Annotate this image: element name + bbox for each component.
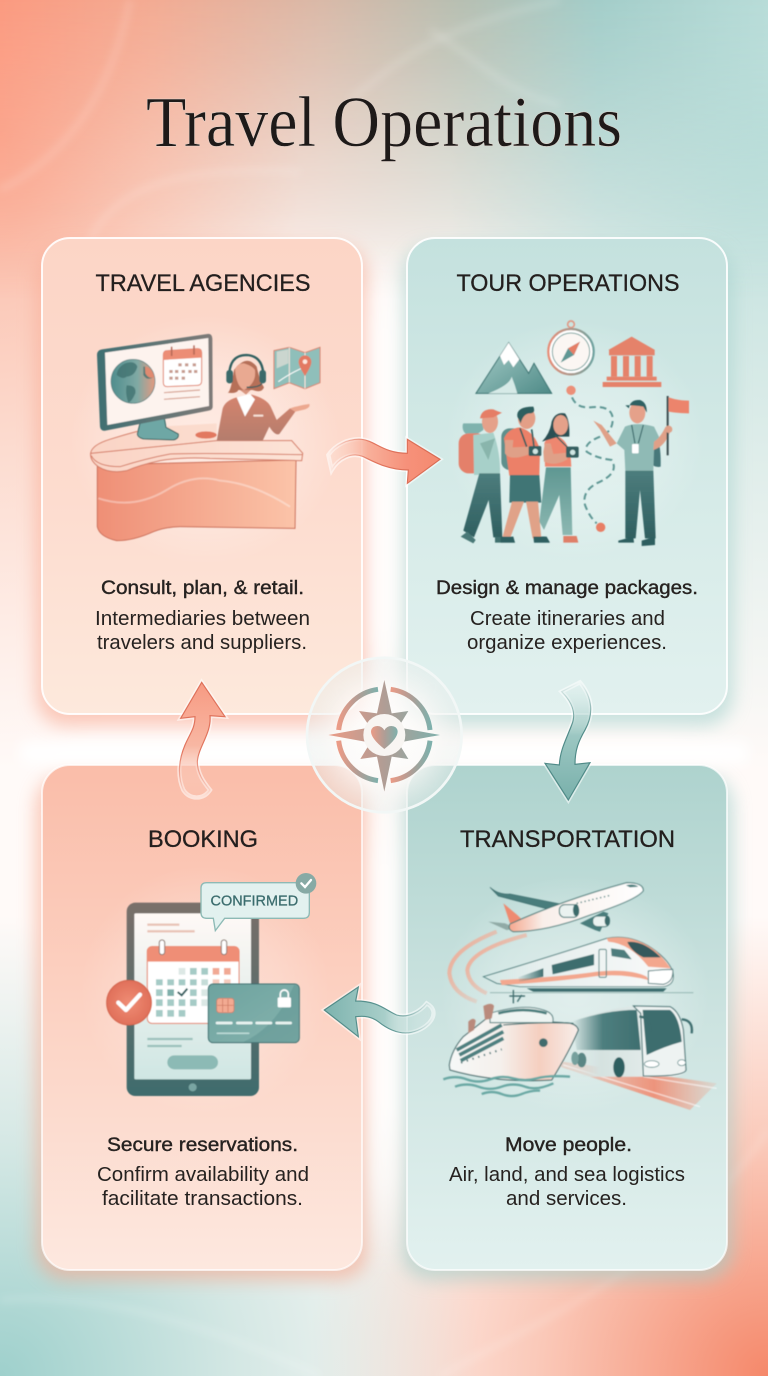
calendar xyxy=(147,940,239,1023)
text: transportation: and services. xyxy=(506,1188,627,1210)
panel: travel agencies xyxy=(42,238,362,714)
text: travel agencies: Intermediaries between xyxy=(95,608,310,630)
compass ring xyxy=(339,689,430,781)
dashed route xyxy=(566,386,614,532)
hiker with backpack xyxy=(459,409,515,543)
gap highlights xyxy=(20,240,748,1280)
agent figure xyxy=(217,355,310,441)
text: transportation: Move people. xyxy=(505,1134,632,1156)
monitor xyxy=(97,334,213,440)
mountain xyxy=(476,343,552,393)
train xyxy=(483,937,693,993)
motion trails xyxy=(449,932,527,1002)
panel: transportation xyxy=(407,765,727,1270)
icon: travel agent at desk xyxy=(91,334,320,541)
confirmed bubble xyxy=(201,873,316,931)
text: tour operations: Create itineraries and xyxy=(470,608,665,630)
arrow: booking to agencies xyxy=(179,682,225,797)
map xyxy=(274,347,320,389)
bus xyxy=(560,1006,717,1110)
arrow: agencies to tour operations xyxy=(328,439,440,483)
illustration: tour group with guide xyxy=(459,321,689,546)
check badge xyxy=(107,980,151,1025)
waves xyxy=(443,1076,570,1096)
heart xyxy=(371,726,398,749)
tablet xyxy=(127,903,259,1096)
confirmed bubble: CONFIRMED xyxy=(210,894,298,910)
text: travel agencies: travelers and suppliers. xyxy=(97,632,307,654)
text: booking xyxy=(97,1134,309,1210)
illustration glow xyxy=(445,320,705,560)
arrow: tour operations to transportation xyxy=(545,682,591,800)
panel: tour operations xyxy=(407,238,727,714)
heading: travel agencies: TRAVEL AGENCIES xyxy=(96,270,310,297)
text: travel agencies xyxy=(95,577,310,654)
text: tour operations: organize experiences. xyxy=(467,632,667,654)
illustration glow xyxy=(80,865,330,1115)
credit card xyxy=(208,984,299,1043)
illustration glow xyxy=(70,315,340,565)
illustration: plane, train, ship, bus xyxy=(443,883,717,1110)
temple xyxy=(603,337,661,387)
text: tour operations: Design & manage packages. xyxy=(436,577,698,599)
tour guide with flag xyxy=(593,396,689,546)
heading: booking: BOOKING xyxy=(148,826,258,853)
text: booking: facilitate transactions. xyxy=(102,1188,303,1210)
airplane xyxy=(488,883,643,932)
text: booking: Secure reservations. xyxy=(107,1134,298,1156)
illustration glow xyxy=(440,875,710,1115)
tourist woman xyxy=(534,413,579,543)
illustration: tablet booking xyxy=(107,873,316,1096)
arrow: transportation to booking xyxy=(324,987,434,1037)
text: tour operations xyxy=(436,577,698,654)
heading: transportation: TRANSPORTATION xyxy=(460,826,675,853)
text: booking: Confirm availability and xyxy=(97,1164,309,1186)
top background band xyxy=(0,0,768,300)
text: transportation: Air, land, and sea logistics xyxy=(449,1164,685,1186)
card glow xyxy=(36,246,733,1280)
cruise ship xyxy=(449,990,578,1081)
text: transportation xyxy=(449,1134,685,1210)
panel: booking xyxy=(42,765,362,1270)
tourist in red shirt xyxy=(501,407,550,543)
text: travel agencies: Consult, plan, & retail. xyxy=(101,577,304,599)
center compass emblem xyxy=(307,658,462,812)
compass xyxy=(548,321,594,374)
compass star xyxy=(328,680,440,792)
heading: tour operations: TOUR OPERATIONS xyxy=(456,270,680,297)
title: Travel Operations xyxy=(146,82,622,162)
reception desk xyxy=(91,423,303,541)
